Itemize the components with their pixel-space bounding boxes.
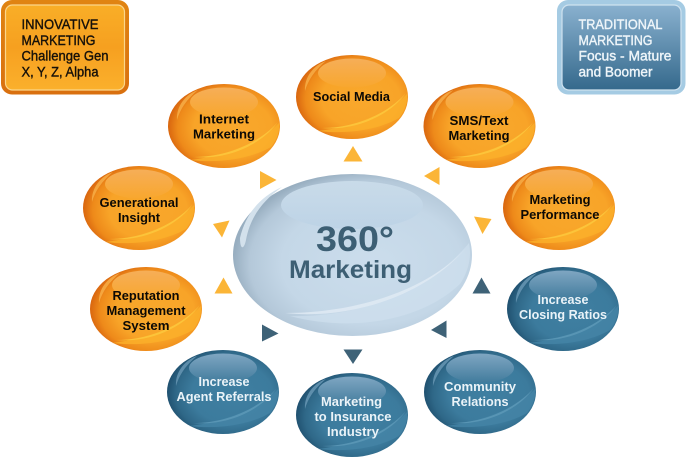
heading: marketing: Marketing xyxy=(289,256,412,284)
innovative marketing text: Challenge Gen xyxy=(22,48,108,64)
bubble: community relations: Community xyxy=(444,379,517,394)
arrow: from insurance industry xyxy=(344,350,362,364)
bubble: internet marketing: Internet xyxy=(199,112,250,126)
bubble: increase agent referrals: Agent Referrals xyxy=(176,389,272,404)
innovative marketing text: INNOVATIVE xyxy=(22,16,98,32)
innovative marketing text xyxy=(22,16,108,80)
bubble: community relations: Relations xyxy=(452,394,508,409)
arrow: from community relations xyxy=(431,320,446,338)
arrow: to sms/text marketing xyxy=(424,167,440,185)
bubble: marketing performance: Marketing xyxy=(530,192,591,207)
innovative marketing text: X, Y, Z, Alpha xyxy=(22,64,99,80)
bubble: marketing performance: Performance xyxy=(520,207,600,222)
arrow: from agent referrals xyxy=(262,324,278,342)
bubble: increase closing ratios: Closing Ratios xyxy=(519,307,607,322)
traditional marketing text: Focus - Mature xyxy=(578,48,672,64)
panel: traditional marketing xyxy=(557,0,686,94)
arrow: to marketing performance xyxy=(474,216,492,234)
heading: 360 degrees: 360° xyxy=(316,220,394,259)
traditional marketing text xyxy=(578,16,672,80)
arrow: to reputation management system xyxy=(214,278,232,294)
bubble: generational insight: Insight xyxy=(118,210,161,225)
bubble: marketing to insurance industry: Industry xyxy=(327,424,380,439)
arrow: from closing ratios xyxy=(472,278,490,294)
bubble: increase closing ratios: Increase xyxy=(538,292,588,307)
bubble: sms/text marketing xyxy=(424,84,536,168)
panel: innovative marketing xyxy=(1,0,129,94)
traditional marketing text: MARKETING xyxy=(578,32,652,48)
bubble: marketing performance xyxy=(503,166,615,250)
bubble: reputation management system: Management xyxy=(106,303,186,318)
bubble: generational insight xyxy=(83,166,195,250)
bubble: generational insight: Generational xyxy=(100,195,178,210)
bubble: sms/text marketing: Marketing xyxy=(448,128,510,143)
arrow: to internet marketing xyxy=(260,171,276,189)
bubble: increase agent referrals: Increase xyxy=(198,374,250,389)
arrow: to generational insight xyxy=(213,220,230,238)
bubble: social media xyxy=(296,55,408,139)
bubble: reputation management system: Reputation xyxy=(112,288,180,303)
bubble: social media: Social Media xyxy=(313,89,391,104)
bubble: reputation management system xyxy=(90,267,202,351)
traditional marketing text: TRADITIONAL xyxy=(578,16,663,32)
center bubble: 360 marketing xyxy=(233,174,472,336)
bubble: sms/text marketing: SMS/Text xyxy=(450,113,509,128)
bubble: increase closing ratios xyxy=(507,267,619,351)
innovative marketing text: MARKETING xyxy=(22,32,96,48)
arrow: to social media xyxy=(344,146,362,162)
bubble: marketing to insurance industry: Marketing xyxy=(321,394,382,409)
bubble: marketing to insurance industry xyxy=(296,373,408,457)
bubble: increase agent referrals xyxy=(167,350,279,434)
bubble: internet marketing xyxy=(168,84,280,168)
bubble: community relations xyxy=(424,350,536,434)
traditional marketing text: and Boomer xyxy=(578,64,653,80)
bubble: reputation management system: System xyxy=(122,318,170,333)
bubble: marketing to insurance industry: to Insurance xyxy=(314,409,392,424)
bubble: internet marketing: Marketing xyxy=(193,126,255,142)
